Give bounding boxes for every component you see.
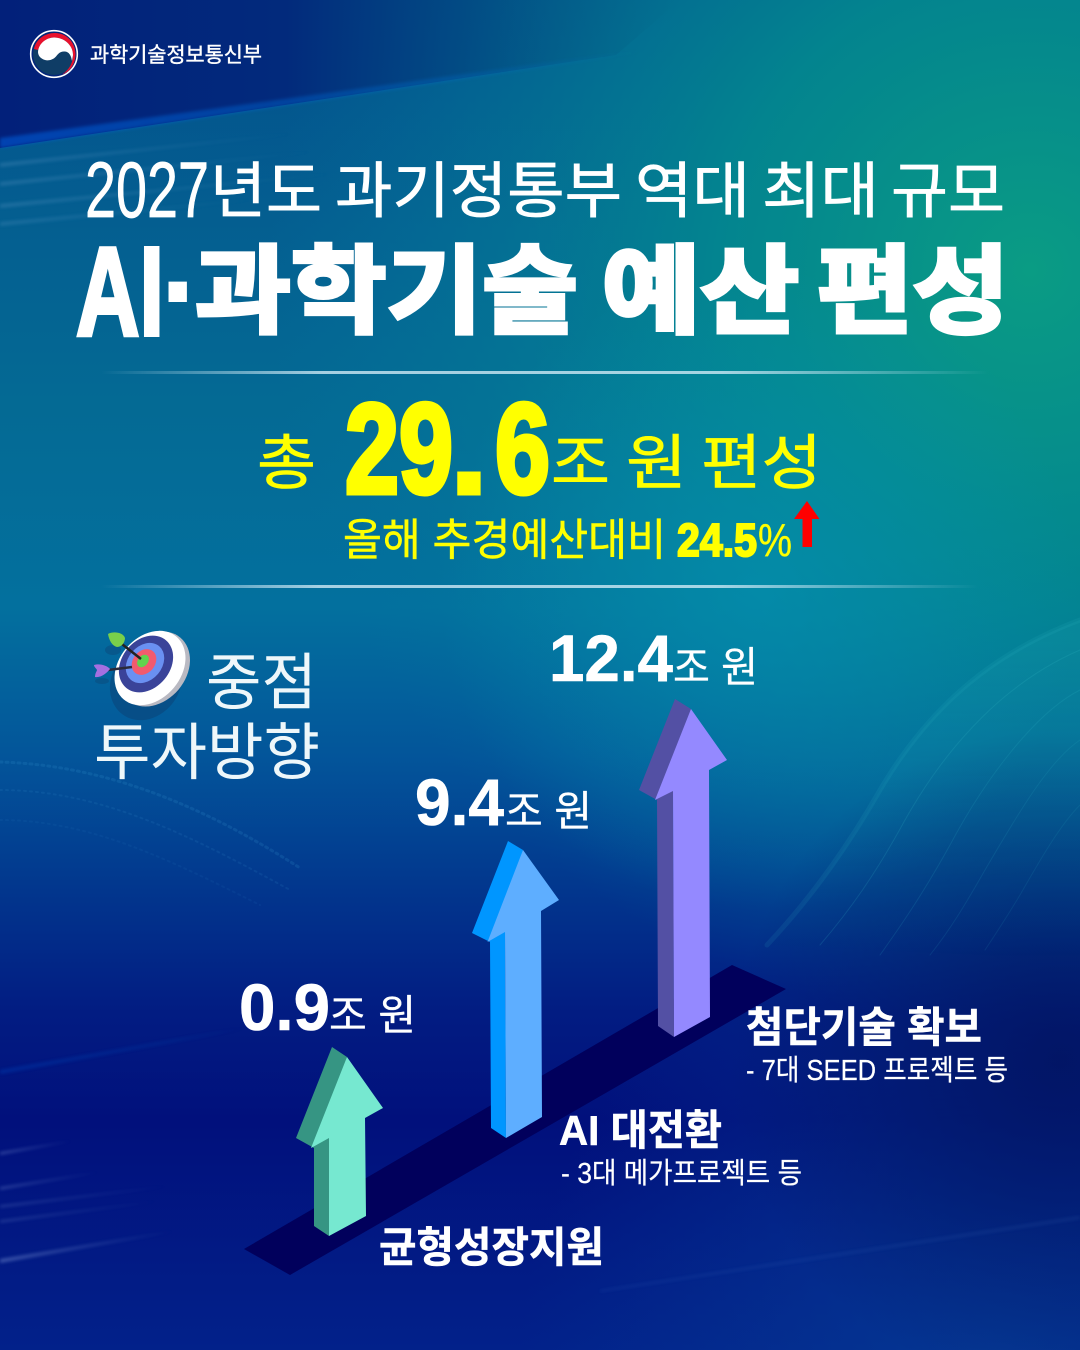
divider	[100, 585, 980, 588]
value: 9.4	[415, 765, 592, 839]
amount 29.6: 6	[495, 378, 550, 521]
heading: investment direction	[94, 649, 320, 788]
arrow: purple 12.4	[639, 699, 727, 1037]
value: 9.4: 9.4	[415, 765, 504, 839]
value: 9.4: 조 원	[505, 788, 592, 835]
icon: taegeuk emblem	[31, 31, 77, 77]
arrow: green 0.9	[296, 1047, 383, 1236]
title line 2: ·	[166, 242, 194, 342]
title line 2: 편성	[817, 239, 1009, 346]
ministry name: 과학기술정보통신부	[90, 44, 262, 67]
arrow: blue 9.4	[472, 841, 559, 1138]
title line 2: AI	[76, 221, 164, 362]
value: 12.4: 12.4	[549, 621, 673, 695]
value: 12.4	[549, 621, 758, 695]
amount 29.6: .	[451, 378, 487, 521]
divider	[100, 371, 990, 374]
label: advanced technology: - 7대 SEED 프로젝트 등	[746, 1054, 1008, 1087]
year over year comparison	[343, 514, 792, 566]
label: balanced growth support: 균형성장지원	[379, 1224, 604, 1271]
unit text	[551, 430, 822, 497]
title line 1: 년도	[210, 157, 322, 225]
title line 1: 과기정통부	[335, 157, 622, 225]
value: 0.9: 조 원	[329, 992, 416, 1039]
title line 1: 2027	[85, 145, 209, 234]
value: 0.9	[239, 970, 416, 1044]
unit text: 편성	[701, 430, 822, 497]
heading: investment direction: 투자방향	[94, 719, 320, 788]
heading: investment direction: 중점	[206, 649, 317, 718]
percent value: 24.5	[677, 514, 757, 566]
label: advanced technology: 첨단기술 확보	[746, 1004, 982, 1051]
title line 2: 예산	[602, 239, 799, 346]
title line 1: 규모	[891, 157, 1005, 225]
value: 12.4: 조 원	[673, 644, 758, 691]
total budget headline	[257, 378, 822, 521]
percent sign: %	[758, 514, 792, 566]
title line 1	[85, 145, 1005, 234]
label: advanced technology	[746, 1004, 1008, 1087]
unit text: 원	[626, 430, 687, 497]
label: AI transition: AI 대전환	[559, 1107, 722, 1154]
amount 29.6	[345, 378, 550, 521]
platform	[244, 965, 786, 1275]
title line 1: 최대	[762, 157, 879, 225]
logo: ministry emblem and name	[31, 31, 262, 77]
value: 0.9: 0.9	[239, 970, 330, 1044]
label: total: 총	[257, 430, 316, 497]
comparison label: 올해 추경예산대비	[343, 516, 666, 565]
label: AI transition	[559, 1107, 802, 1190]
label: AI transition: - 3대 메가프로젝트 등	[561, 1157, 802, 1190]
icon: dartboard target	[94, 617, 205, 734]
title line 2	[76, 221, 1009, 362]
amount 29.6: 29	[345, 378, 453, 521]
arrow: red up	[794, 501, 820, 547]
title line 2: 과학기술	[195, 239, 578, 346]
title line 1: 역대	[635, 157, 750, 225]
unit text: 조	[551, 430, 610, 497]
